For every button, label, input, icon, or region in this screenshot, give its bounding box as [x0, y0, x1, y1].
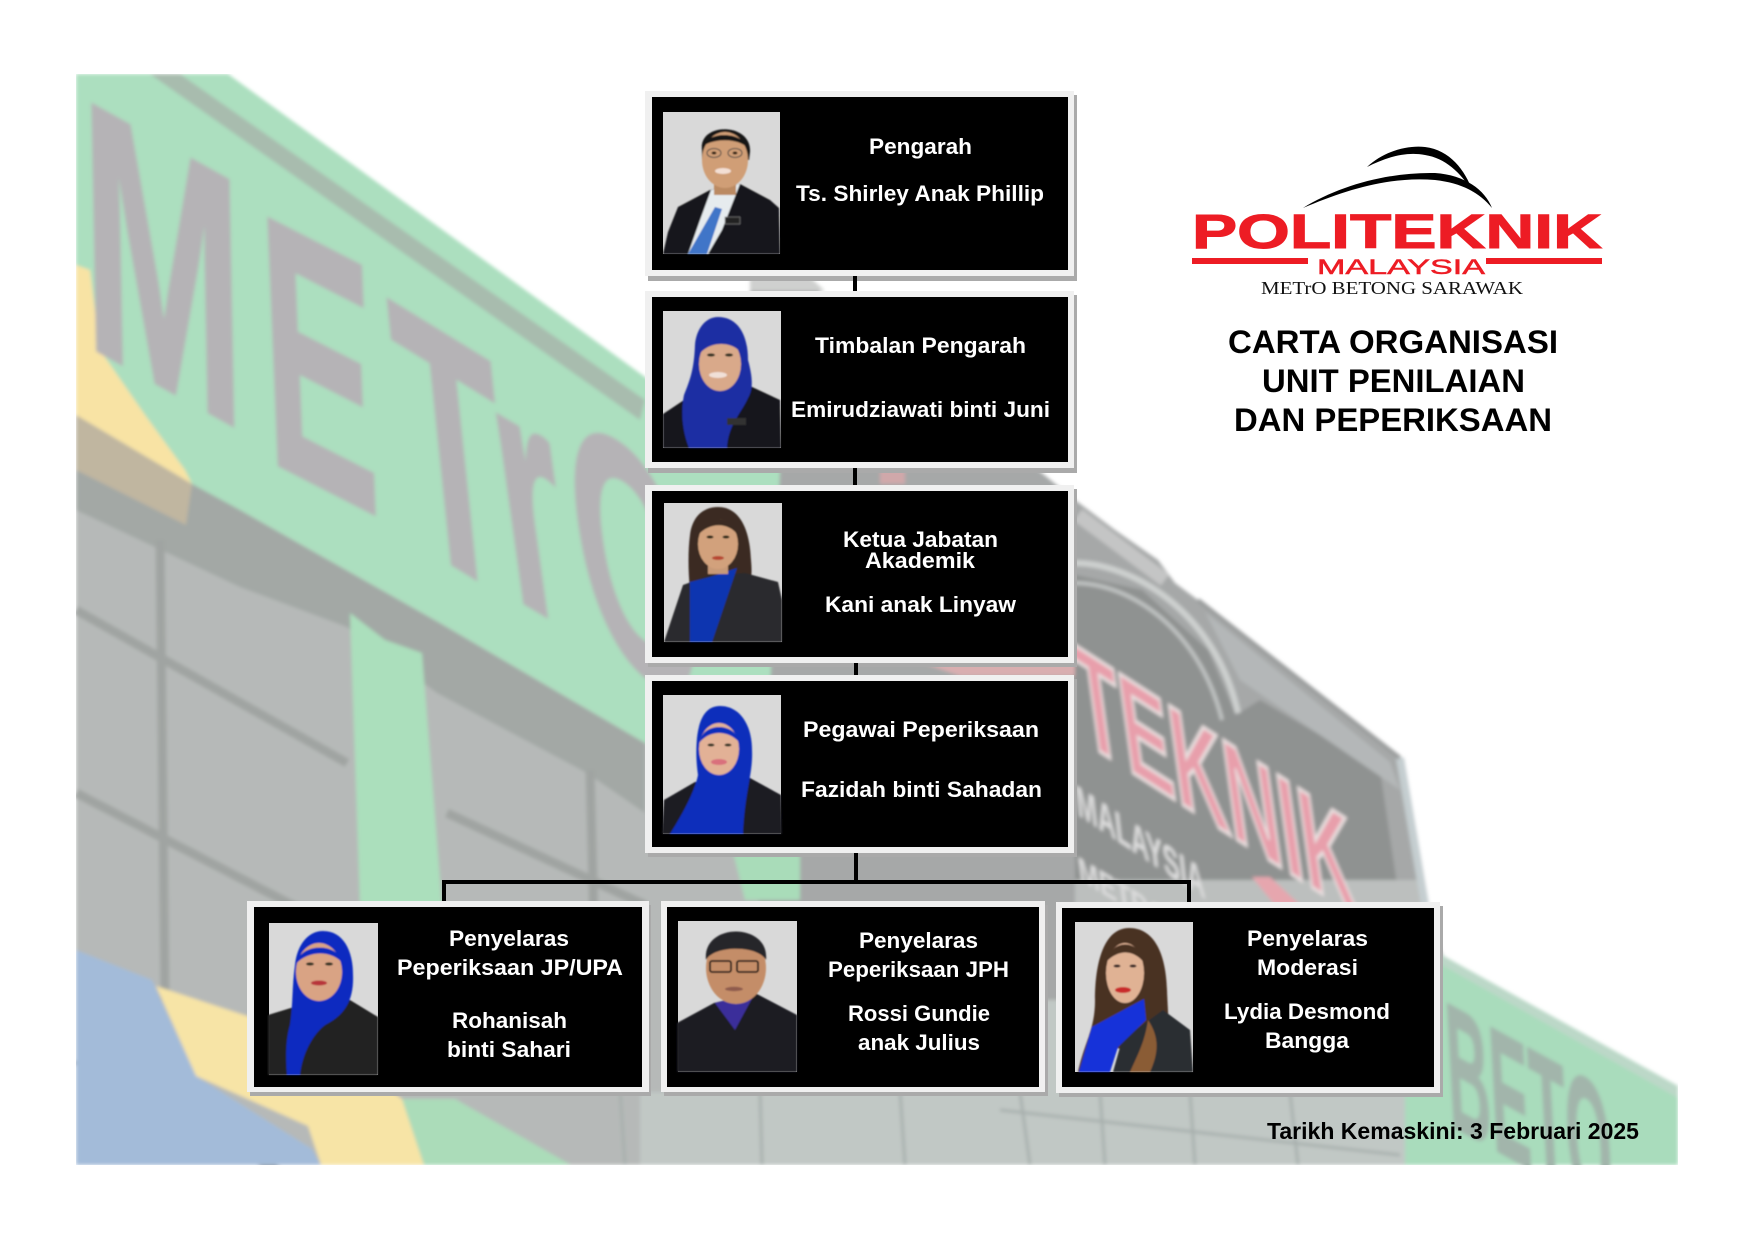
panel: Pegawai Peperiksaan — [645, 675, 1077, 857]
connectors between boxes — [442, 276, 1191, 902]
photo: Rohanisah — [268, 923, 378, 1075]
wordmark: campus: METrO BETONG SARAWAK — [1261, 278, 1523, 298]
text: Penyelaras Peperiksaan JPH: anak Julius — [858, 1030, 980, 1055]
panel: Penyelaras Moderasi — [1056, 902, 1443, 1097]
text: Penyelaras Peperiksaan JP/UPA: Penyelaras — [449, 926, 569, 951]
text: Penyelaras Peperiksaan JPH: Peperiksaan JPH — [828, 957, 1009, 982]
faint building letters: O — [545, 332, 725, 790]
dome and sign interior — [1075, 575, 1400, 905]
background: faded photo of polytechnic building: METRO — [1076, 849, 1171, 942]
text: Penyelaras Moderasi: Penyelaras — [1247, 926, 1368, 951]
text: Timbalan Pengarah — [791, 333, 1050, 422]
text: Penyelaras Peperiksaan JPH: Rossi Gundie — [848, 1001, 990, 1026]
photo: Fazidah — [662, 695, 782, 834]
lower facade with windows — [76, 509, 760, 1165]
text: Pengarah: Pengarah — [869, 134, 972, 159]
grey band under fascia — [76, 470, 645, 813]
faint building letters — [90, 102, 1612, 1165]
window mullions — [76, 540, 645, 1200]
blue and yellow canopy — [156, 986, 424, 1165]
faint building letters: r — [467, 276, 589, 711]
wordmark: POLITEKNIK — [1192, 206, 1602, 259]
title: UNIT PENILAIAN — [1262, 363, 1525, 399]
text: Pengarah: Ts. Shirley Anak Phillip — [796, 181, 1044, 206]
icon: swoosh — [1303, 147, 1492, 208]
text: Penyelaras Peperiksaan JPH — [828, 928, 1009, 1055]
panel: Pengarah — [645, 91, 1077, 281]
text: Pegawai Peperiksaan — [801, 717, 1042, 802]
text: Penyelaras Peperiksaan JP/UPA: binti Sahari — [447, 1037, 571, 1062]
faint building letters: T — [378, 223, 525, 679]
photo: Rossi — [677, 921, 797, 1072]
faint sign lettering: TEKNIK — [1064, 610, 1365, 950]
photo: Kani — [664, 503, 782, 642]
green lower right — [1405, 954, 1678, 1165]
title: CARTA ORGANISASI — [1228, 324, 1558, 360]
update date: Tarikh Kemaskini: 3 Februari 2025 — [1267, 1118, 1639, 1144]
sign border and ring — [1400, 758, 1425, 905]
text: Ketua Jabatan Akademik: Kani anak Linyaw — [825, 592, 1017, 617]
text: Penyelaras Peperiksaan JP/UPA — [397, 926, 623, 1062]
text: Ketua Jabatan Akademik: Ketua Jabatan — [843, 527, 998, 552]
lower right light facade — [640, 1000, 1445, 1165]
top grey stripe on fascia — [150, 74, 645, 420]
text: Penyelaras Peperiksaan JP/UPA: Peperiksaan JP/UPA — [397, 955, 623, 980]
title — [1228, 324, 1558, 438]
photo: Emirudziawati — [663, 311, 781, 448]
title: DAN PEPERIKSAAN — [1234, 402, 1552, 438]
logo: Politeknik Malaysia — [1192, 147, 1602, 298]
text: Pegawai Peperiksaan: Pegawai Peperiksaan — [803, 717, 1039, 742]
panel: Timbalan Pengarah — [645, 291, 1077, 473]
tower behind the boxes — [750, 268, 1445, 1000]
text: Penyelaras Peperiksaan JP/UPA: Rohanisah — [452, 1008, 567, 1033]
text: Penyelaras Moderasi — [1224, 926, 1390, 1053]
text: Pegawai Peperiksaan: Fazidah binti Sahadan — [801, 777, 1042, 802]
text: Ketua Jabatan Akademik — [825, 527, 1017, 617]
text: Ketua Jabatan Akademik: Akademik — [865, 548, 976, 573]
text: Timbalan Pengarah: Emirudziawati binti Juni — [791, 397, 1050, 422]
wordmark: Malaysia: MALAYSIA — [1317, 255, 1486, 279]
text: Penyelaras Moderasi: Lydia Desmond — [1224, 999, 1390, 1024]
text: Timbalan Pengarah: Timbalan Pengarah — [815, 333, 1026, 358]
panel: Penyelaras Peperiksaan JPH — [661, 901, 1048, 1096]
text: Pengarah — [796, 134, 1044, 206]
faint pink stripes near boxes — [930, 667, 1077, 678]
faint building letters: M — [78, 22, 248, 510]
text: Penyelaras Moderasi: Bangga — [1265, 1028, 1350, 1053]
green column — [350, 613, 442, 905]
faint building letters: E — [253, 134, 385, 594]
panel: Ketua Jabatan Akademik — [645, 485, 1077, 667]
photo: Shirley — [663, 112, 780, 254]
photo: Lydia — [1075, 922, 1193, 1072]
text: Penyelaras Peperiksaan JPH: Penyelaras — [859, 928, 978, 953]
panel: Penyelaras Peperiksaan JP/UPA — [247, 901, 651, 1096]
background: faded photo of polytechnic building: MALAYSIA — [1074, 775, 1207, 910]
text: Penyelaras Moderasi: Moderasi — [1257, 955, 1358, 980]
yellow at left of fascia — [76, 265, 192, 484]
green fascia — [76, 74, 780, 790]
